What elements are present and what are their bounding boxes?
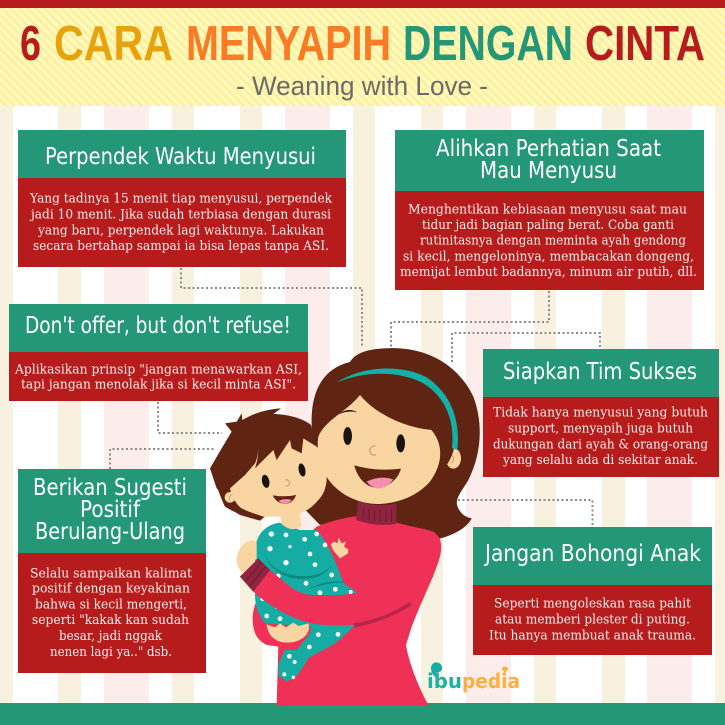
title	[20, 17, 705, 71]
body: jangan: Itu hanya membuat anak trauma.	[489, 628, 696, 643]
title: 6	[20, 17, 41, 71]
body: perpendek	[29, 192, 332, 254]
heading: perpendek: Perpendek Waktu Menyusui	[45, 144, 316, 170]
mother sweater	[253, 516, 441, 705]
body: don't offer: tapi jangan menolak jika si kecil minta ASI".	[21, 377, 296, 392]
title: MENYAPIH	[186, 17, 391, 71]
panel: don't offer	[9, 304, 308, 401]
baby ear	[225, 492, 235, 503]
body: berikan	[30, 566, 193, 660]
body: berikan: nenen lagi ya.." dsb.	[50, 645, 172, 660]
mother mouth	[354, 465, 401, 488]
mother nose	[370, 445, 376, 455]
heading: don't offer: Don't offer, but don't refuse!	[25, 313, 291, 339]
sleeve cuff	[240, 558, 270, 592]
baby right hand	[331, 537, 348, 558]
baby hair	[210, 408, 317, 521]
mother ear	[446, 448, 461, 469]
mother eyes	[338, 410, 405, 452]
body: alihkan: rutinitasnya dengan meminta ayah gendong	[420, 234, 686, 249]
body: jangan	[489, 597, 696, 643]
body: siapkan	[493, 406, 709, 468]
baby mouth	[273, 495, 296, 504]
mother face	[318, 395, 441, 504]
heading: berikan	[33, 475, 187, 545]
body: alihkan: tidur jadi bagian paling berat. Coba ganti	[422, 218, 674, 233]
body: alihkan	[400, 202, 697, 280]
body: perpendek: yang baru, perpendek lagi waktunya. Lakukan	[37, 223, 325, 238]
body: berikan: seperti "kakak kan sudah	[32, 613, 190, 628]
logo: ibupedia: pedia	[462, 669, 520, 693]
body: siapkan: support, menyapih juga butuh	[508, 422, 694, 437]
body: berikan: positif dengan keyakinan	[32, 582, 191, 597]
logo heart	[502, 667, 508, 673]
title: CARA	[54, 17, 173, 71]
footer bar	[0, 703, 725, 725]
header band	[0, 8, 725, 106]
body: don't offer: Aplikasikan prinsip "jangan menawarkan ASI,	[14, 362, 302, 377]
body: alihkan: memijat lembut badannya, minum air putih, dll.	[400, 265, 697, 280]
logo icon	[431, 662, 442, 677]
top red bar	[0, 0, 725, 8]
body: perpendek: secara bertahap sampai ia bisa lepas tanpa ASI.	[33, 239, 329, 254]
mother arm	[240, 553, 435, 626]
body: berikan: bahwa si kecil mengerti,	[35, 597, 187, 612]
panel: perpendek waktu menyusui	[18, 130, 346, 267]
heading: alihkan: Alihkan Perhatian Saat	[436, 136, 661, 162]
panel: alihkan perhatian	[395, 130, 704, 290]
body: perpendek: jadi 10 menit. Jika sudah terbiasa dengan durasi	[29, 208, 331, 223]
panel: jangan bohongi anak	[473, 527, 712, 655]
headband	[337, 369, 458, 450]
body: berikan: Selalu sampaikan kalimat	[30, 566, 193, 581]
heading: siapkan: Siapkan Tim Sukses	[503, 359, 697, 385]
heading: alihkan: Mau Menyusu	[480, 158, 617, 184]
panel: siapkan tim sukses	[483, 349, 719, 477]
baby pyjama	[255, 523, 356, 682]
heading: berikan: Positif	[80, 497, 141, 523]
baby nose	[285, 479, 290, 486]
title: DENGAN	[403, 17, 573, 71]
body: jangan: Seperti mengoleskan rasa pahit	[494, 597, 692, 612]
body: siapkan: dukungan dari ayah & orang-orang	[493, 437, 708, 452]
body: siapkan: Tidak hanya menyusui yang butuh	[493, 406, 709, 421]
heading: berikan: Berikan Sugesti	[33, 475, 187, 501]
body: perpendek: Yang tadinya 15 menit tiap menyusui, perpendek	[29, 192, 332, 207]
logo: ibupedia	[427, 662, 520, 693]
panel: berikan sugesti	[18, 469, 206, 673]
baby eyes	[261, 463, 307, 489]
mother hair	[306, 348, 480, 539]
dotted connectors	[110, 268, 600, 527]
hair lock	[430, 427, 455, 482]
subtitle: - Weaning with Love -	[236, 71, 488, 101]
body: alihkan: Menghentikan kebiasaan menyusu saat mau	[408, 202, 687, 217]
heading: alihkan	[436, 136, 661, 184]
heading: jangan: Jangan Bohongi Anak	[483, 541, 702, 567]
illustration: mother holding child	[210, 348, 480, 705]
body: berikan: besar, jadi nggak	[59, 629, 162, 644]
pyjama dots	[260, 531, 353, 679]
body: jangan: atau memberi plester di puting.	[495, 612, 690, 627]
turtleneck	[356, 501, 397, 525]
body: alihkan: si kecil, mengeloninya, membacakan dongeng,	[403, 249, 694, 264]
baby face	[230, 438, 327, 517]
body: don't offer	[14, 362, 302, 392]
baby belly	[267, 623, 309, 643]
logo wordmark: ibu	[427, 669, 462, 693]
body: siapkan: yang selalu ada di sekitar anak.	[502, 453, 698, 468]
baby left hand	[237, 540, 257, 573]
arm shadow	[353, 602, 412, 627]
heading: berikan: Berulang-Ulang	[35, 519, 185, 545]
baby neck	[280, 513, 302, 529]
